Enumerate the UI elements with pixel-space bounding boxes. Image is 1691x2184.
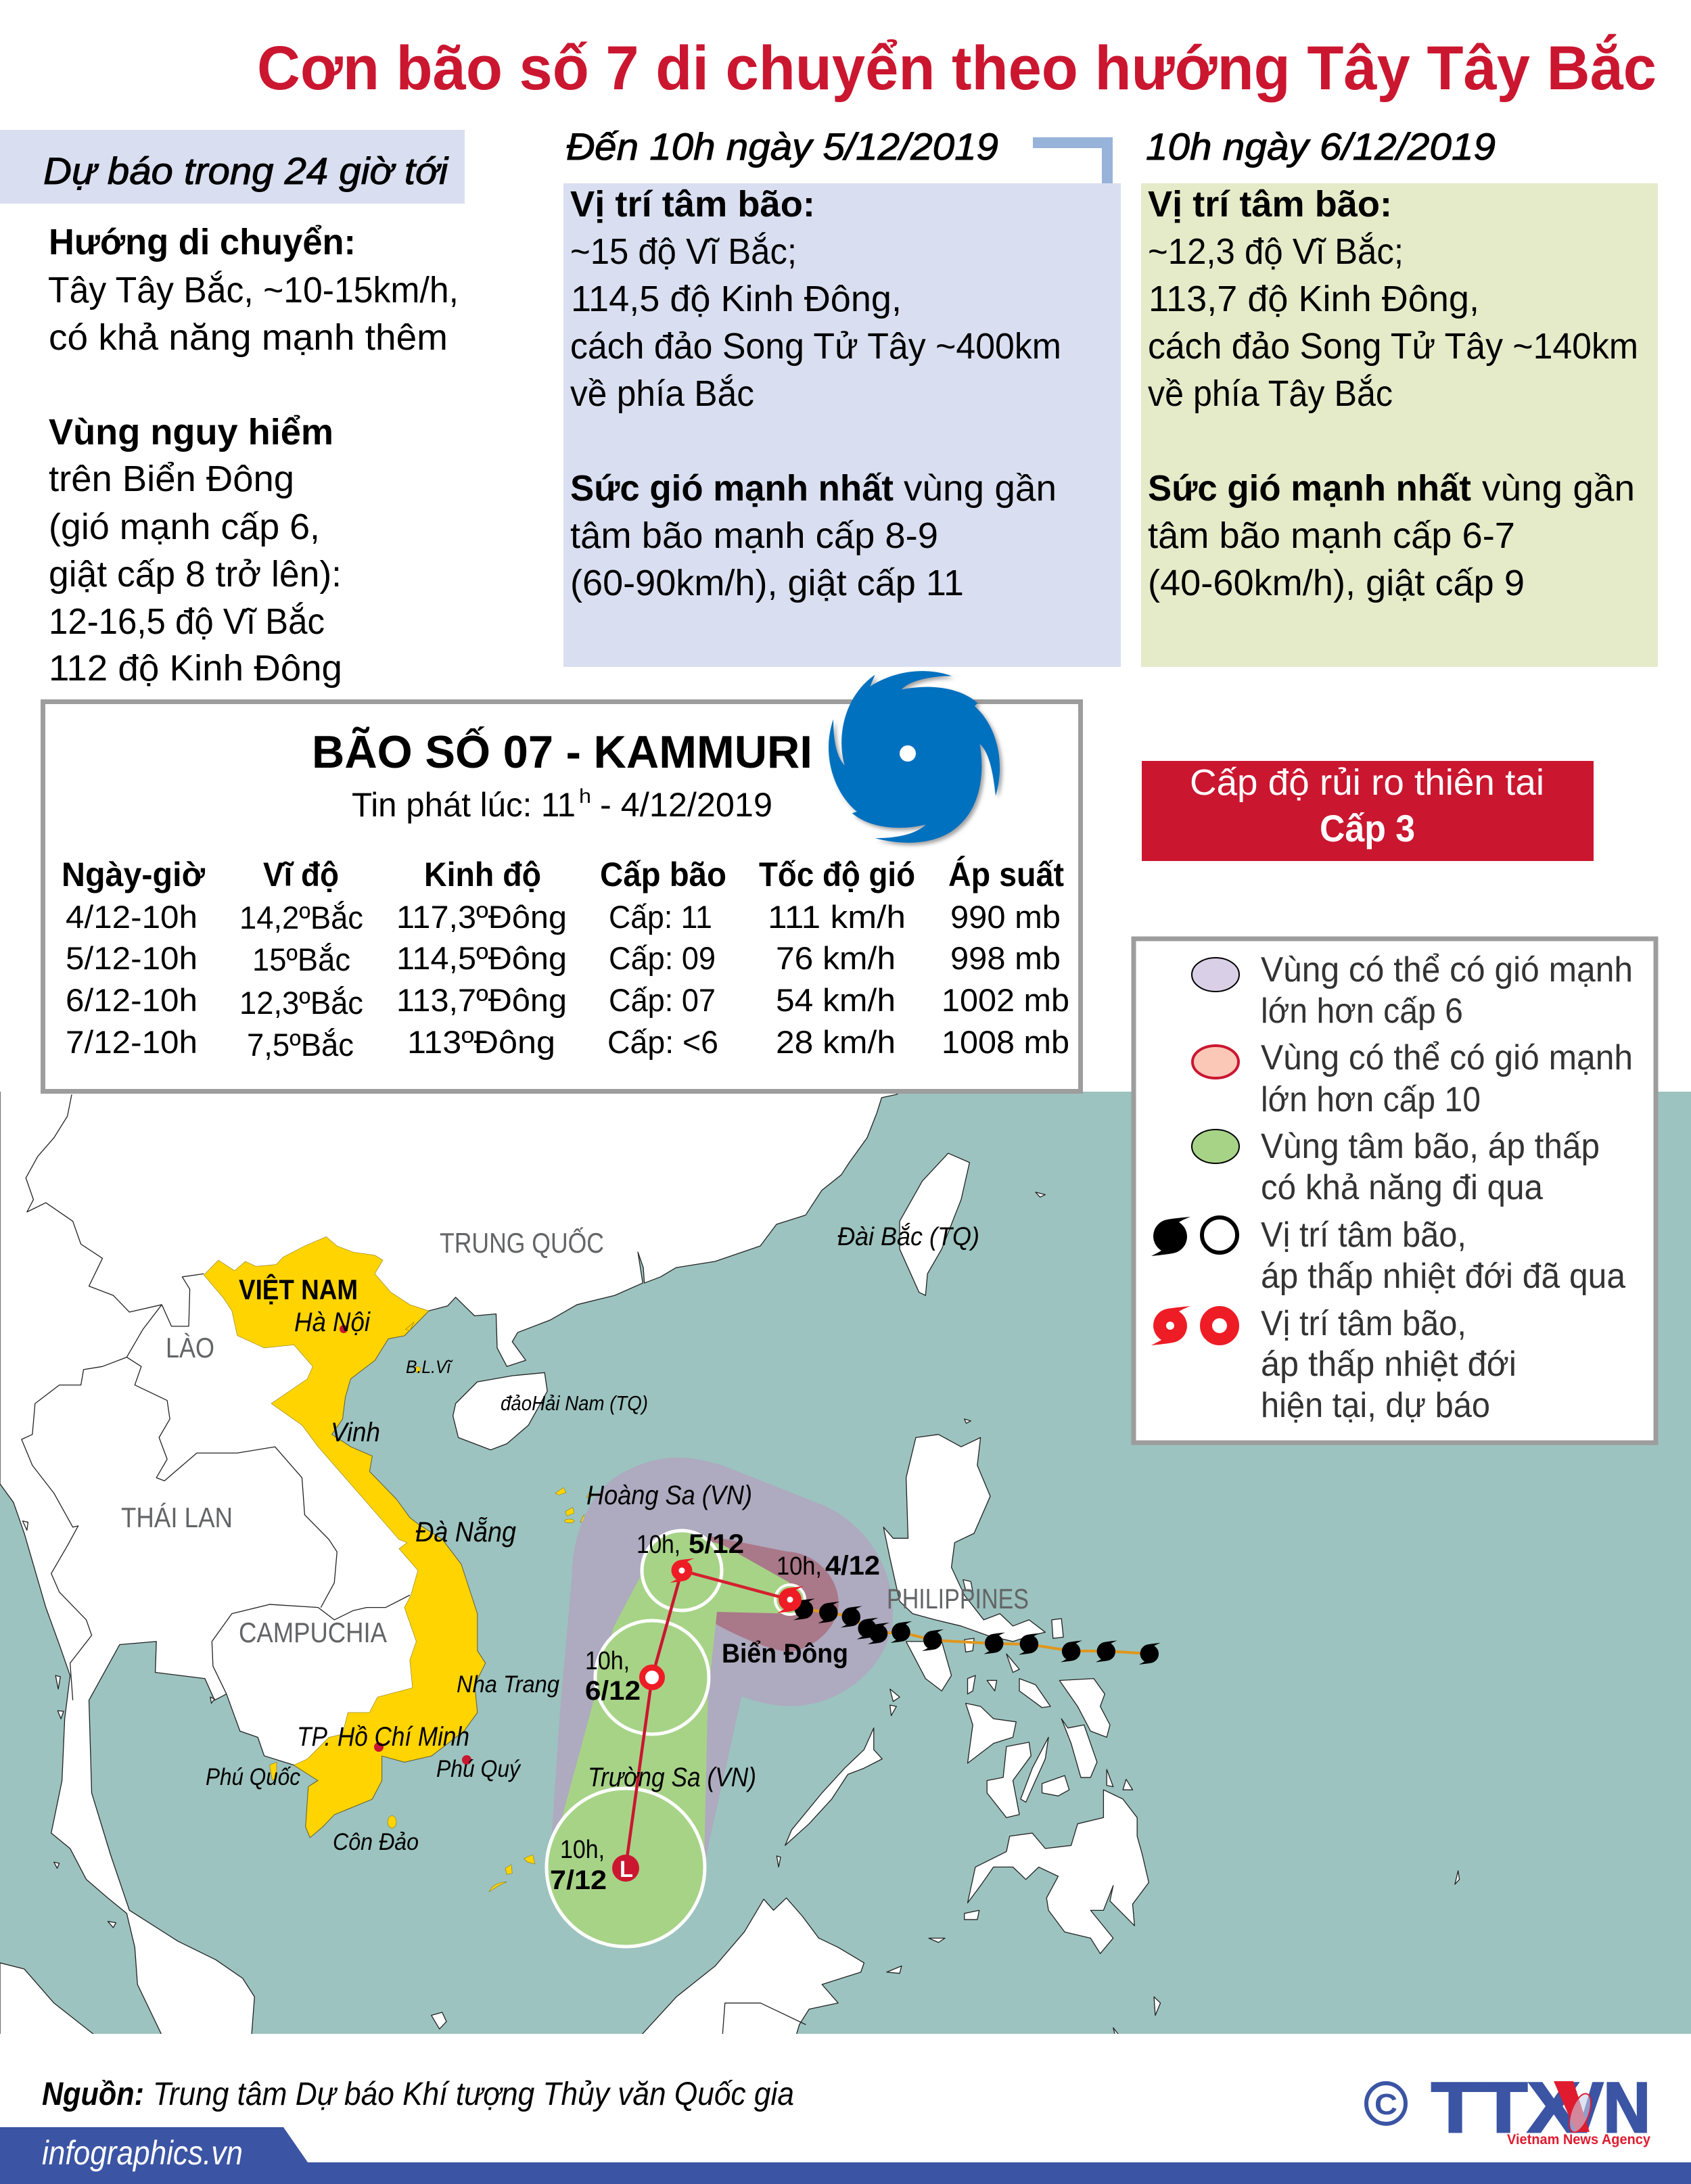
legend item: storm centre zone	[1192, 1127, 1600, 1207]
legend item: storm centre zone: Vùng tâm bão, áp thấp	[1261, 1127, 1600, 1166]
table header row: Tốc độ gió	[759, 856, 915, 893]
storm danger zone: wind above level 6	[551, 1458, 893, 1869]
table row 6/12: 6/12-10h	[66, 982, 198, 1018]
table row 6/12: 54 km/h	[776, 982, 896, 1018]
legend item: current and forecast positions: hiện tại, dự báo	[1261, 1386, 1490, 1425]
strongest wind text	[570, 468, 1057, 603]
table row 6/12: 113,7ºĐông	[396, 982, 567, 1018]
storm centre position text: Vị trí tâm bão:	[1148, 184, 1392, 225]
table row 6/12	[66, 982, 1069, 1021]
panel: forecast to 5/12	[563, 125, 1121, 667]
place labels: TP. Hồ Chí Minh	[297, 1722, 469, 1752]
panel: storm data table	[43, 702, 1081, 1092]
storm centre position text: về phía Bắc	[570, 373, 754, 414]
danger zone text: 12-16,5 độ Vĩ Bắc	[49, 601, 325, 642]
panel background	[563, 183, 1121, 667]
legend item: wind above level 10: Vùng có thể có gió mạnh	[1261, 1038, 1633, 1077]
storm centre position text	[1148, 184, 1638, 414]
storm centre position text: 114,5 độ Kinh Đông,	[571, 279, 902, 319]
country labels: LÀO	[166, 1332, 214, 1364]
logo: TTXVN	[1366, 2068, 1650, 2147]
small islands	[270, 1322, 592, 1892]
map	[0, 1082, 1691, 2046]
land: mainland and western islands	[0, 1082, 917, 2046]
table row 7/12	[66, 1024, 1069, 1063]
place labels: Hà Nội	[294, 1307, 371, 1337]
storm centre position text	[570, 184, 1061, 414]
icon: blue storm	[829, 671, 1000, 843]
legend item: current and forecast positions	[1151, 1304, 1516, 1425]
storm date labels: Biển Đông	[722, 1639, 848, 1669]
table header row: Vĩ độ	[263, 856, 339, 893]
place labels: B.L.Vĩ	[406, 1357, 453, 1377]
table row 7/12: 113ºĐông	[407, 1024, 555, 1060]
table row 6/12: 1002 mb	[942, 982, 1069, 1018]
land: Vietnam	[204, 1236, 485, 1838]
strongest wind text: Sức gió mạnh nhất	[570, 468, 894, 509]
danger zone text: 112 độ Kinh Đông	[49, 648, 342, 689]
forecast circle 6/12	[595, 1621, 709, 1734]
legend item: wind above level 6	[1192, 950, 1633, 1031]
place labels: Đài Bắc (TQ)	[837, 1222, 979, 1251]
table row 4/12: 117,3ºĐông	[396, 899, 567, 935]
strongest wind text: vùng gần	[904, 468, 1057, 509]
storm centre position text: 113,7 độ Kinh Đông,	[1149, 279, 1479, 319]
forecast circle 5/12	[642, 1531, 722, 1610]
legend item: past positions: áp thấp nhiệt đới đã qua	[1261, 1257, 1625, 1296]
place labels: Trường Sa (VN)	[588, 1763, 756, 1792]
storm date labels	[550, 1529, 880, 1895]
legend item: current and forecast positions: Vị trí tâm bão,	[1261, 1304, 1466, 1343]
legend item: past positions: Vị trí tâm bão,	[1261, 1215, 1466, 1255]
panel heading: Đến 10h ngày 5/12/2019	[566, 125, 998, 168]
bulletin time: h	[579, 785, 591, 808]
legend item: wind above level 6: Vùng có thể có gió mạnh	[1261, 950, 1633, 990]
storm centre position text: Vị trí tâm bão:	[570, 184, 815, 225]
storm centre position text: ~12,3 độ Vĩ Bắc;	[1148, 231, 1404, 272]
legend item: wind above level 10: lớn hơn cấp 10	[1261, 1080, 1481, 1119]
country labels: VIỆT NAM	[239, 1273, 358, 1305]
country labels: PHILIPPINES	[887, 1583, 1029, 1614]
risk value: Cấp 3	[1320, 807, 1415, 850]
panel: forecast 24 hours	[0, 130, 465, 689]
movement direction text: có khả năng mạnh thêm	[49, 317, 448, 358]
movement direction text: Tây Tây Bắc, ~10-15km/h,	[48, 270, 459, 310]
storm centre position text: ~15 độ Vĩ Bắc;	[570, 231, 797, 272]
country labels: TRUNG QUỐC	[440, 1226, 604, 1259]
connector arrow between panels	[1033, 137, 1113, 183]
legend item: storm centre zone: có khả năng đi qua	[1261, 1168, 1543, 1207]
place labels: Phú Quý	[436, 1756, 522, 1782]
table row 4/12: 111 km/h	[768, 899, 906, 935]
website label: infographics.vn	[42, 2134, 243, 2172]
storm centre position text: cách đảo Song Tử Tây ~140km	[1148, 326, 1638, 367]
storm centre corridor	[561, 1542, 790, 1849]
country labels: CAMPUCHIA	[239, 1617, 387, 1648]
table row 5/12	[66, 940, 1061, 977]
storm date labels: 10h,	[585, 1647, 630, 1675]
forecast heading band	[0, 130, 465, 204]
storm date labels: 7/12	[550, 1865, 607, 1895]
table row 7/12: Cấp: <6	[607, 1024, 718, 1060]
table row 5/12: 15ºBắc	[252, 942, 350, 977]
table row 7/12: 28 km/h	[776, 1024, 896, 1060]
table row 4/12: 990 mb	[950, 899, 1061, 935]
table header row: Kinh độ	[424, 856, 541, 893]
place labels: Đà Nẵng	[415, 1516, 516, 1548]
danger zone text: giật cấp 8 trở lên):	[49, 554, 342, 595]
legend item: wind above level 6: lớn hơn cấp 6	[1261, 992, 1463, 1031]
table row 7/12: 1008 mb	[942, 1024, 1069, 1060]
table row 4/12: 14,2ºBắc	[239, 900, 363, 935]
country labels	[121, 1226, 1029, 1648]
strongest wind text: tâm bão mạnh cấp 8-9	[570, 515, 938, 556]
strongest wind text: (60-90km/h), giật cấp 11	[570, 563, 964, 603]
table row 5/12: Cấp: 09	[609, 940, 716, 976]
place labels: Côn Đảo	[333, 1829, 419, 1855]
danger zone text: Vùng nguy hiểm	[49, 412, 333, 452]
bulletin time: - 4/12/2019	[600, 786, 772, 824]
table header row: Cấp bão	[600, 856, 726, 893]
table frame	[43, 702, 1081, 1092]
storm date labels: 10h,	[636, 1531, 680, 1559]
danger zone text: (gió mạnh cấp 6,	[49, 507, 320, 547]
movement direction text	[48, 222, 459, 358]
danger zone text	[49, 412, 342, 689]
forecast track: L	[620, 1857, 633, 1882]
panel heading: 10h ngày 6/12/2019	[1146, 125, 1496, 168]
strongest wind text	[1148, 468, 1635, 603]
bulletin time: Tin phát lúc: 11	[352, 786, 576, 824]
strongest wind text: (40-60km/h), giật cấp 9	[1148, 563, 1525, 603]
table title: BÃO SỐ 07 - KAMMURI	[312, 726, 812, 778]
logo: TTXVN: TTX	[1431, 2068, 1580, 2147]
forecast heading: Dự báo trong 24 giờ tới	[43, 149, 449, 192]
table header row	[62, 856, 1064, 893]
storm centre position text: cách đảo Song Tử Tây ~400km	[570, 326, 1061, 367]
table header row: Ngày-giờ	[62, 856, 205, 893]
country labels: THÁI LAN	[121, 1502, 233, 1533]
logo: TTXVN: C	[1374, 2088, 1397, 2121]
strongest wind text: Sức gió mạnh nhất	[1148, 468, 1471, 509]
table row 7/12: 7/12-10h	[66, 1024, 198, 1060]
legend item: wind above level 10	[1192, 1038, 1633, 1119]
risk box	[1142, 761, 1594, 861]
place labels: Phú Quốc	[206, 1764, 300, 1790]
past storm track	[790, 1598, 1161, 1665]
footer band	[0, 2127, 1691, 2184]
table row 5/12: 5/12-10h	[66, 940, 198, 976]
place labels: Hoàng Sa (VN)	[586, 1481, 752, 1510]
legend frame	[1134, 939, 1656, 1443]
storm date labels: 10h,	[777, 1552, 822, 1581]
legend item: past positions	[1151, 1215, 1625, 1296]
table row 5/12: 76 km/h	[776, 940, 896, 976]
risk label: Cấp độ rủi ro thiên tai	[1190, 762, 1544, 803]
table row 4/12: 4/12-10h	[66, 899, 198, 935]
logo: TTXVN: VN	[1560, 2068, 1650, 2147]
panel: legend	[1134, 939, 1656, 1443]
city markers	[340, 1325, 471, 1765]
source note: Trung tâm Dự báo Khí tượng Thủy văn Quốc gia	[153, 2076, 794, 2112]
place labels: đảoHải Nam (TQ)	[501, 1391, 648, 1415]
table row 5/12: 114,5ºĐông	[396, 940, 567, 976]
table row 6/12: Cấp: 07	[609, 982, 716, 1018]
table row 4/12: Cấp: 11	[609, 899, 712, 935]
strongest wind text: vùng gần	[1482, 468, 1635, 509]
table row 5/12: 998 mb	[950, 940, 1061, 976]
place labels	[206, 1222, 979, 1855]
legend item: current and forecast positions: áp thấp nhiệt đới	[1261, 1345, 1516, 1384]
sea background	[0, 1092, 1691, 2034]
storm date labels: 10h,	[560, 1836, 605, 1864]
storm centre position text: về phía Tây Bắc	[1148, 373, 1393, 414]
danger zone text: trên Biển Đông	[49, 459, 294, 499]
table row 6/12: 12,3ºBắc	[239, 985, 363, 1021]
forecast track	[612, 1558, 804, 1882]
storm date labels: 5/12	[689, 1529, 744, 1559]
table row 7/12: 7,5ºBắc	[247, 1027, 354, 1063]
table row 4/12	[66, 899, 1061, 935]
strongest wind text: tâm bão mạnh cấp 6-7	[1148, 515, 1515, 556]
table header row: Áp suất	[948, 856, 1064, 893]
forecast circle 7/12	[547, 1788, 705, 1947]
logo: TTXVN: Vietnam News Agency	[1507, 2132, 1650, 2147]
bulletin time	[352, 785, 772, 824]
place labels: Nha Trang	[457, 1671, 559, 1698]
storm danger zone: wind above level 10	[710, 1536, 839, 1652]
land: Philippines, Borneo, Taiwan	[631, 1153, 1460, 2046]
title: Cơn bão số 7 di chuyển theo hướng Tây Tây Bắc	[257, 33, 1657, 103]
storm date labels: 4/12	[825, 1551, 880, 1581]
source note: Nguồn:	[42, 2076, 144, 2112]
place labels: Vinh	[331, 1418, 380, 1447]
panel: forecast 6/12	[1141, 125, 1658, 667]
storm date labels: 6/12	[585, 1676, 641, 1706]
movement direction text: Hướng di chuyển:	[49, 222, 356, 262]
current circle 4/12	[775, 1585, 805, 1614]
panel background	[1141, 183, 1658, 667]
panel: disaster risk level	[1142, 761, 1594, 861]
